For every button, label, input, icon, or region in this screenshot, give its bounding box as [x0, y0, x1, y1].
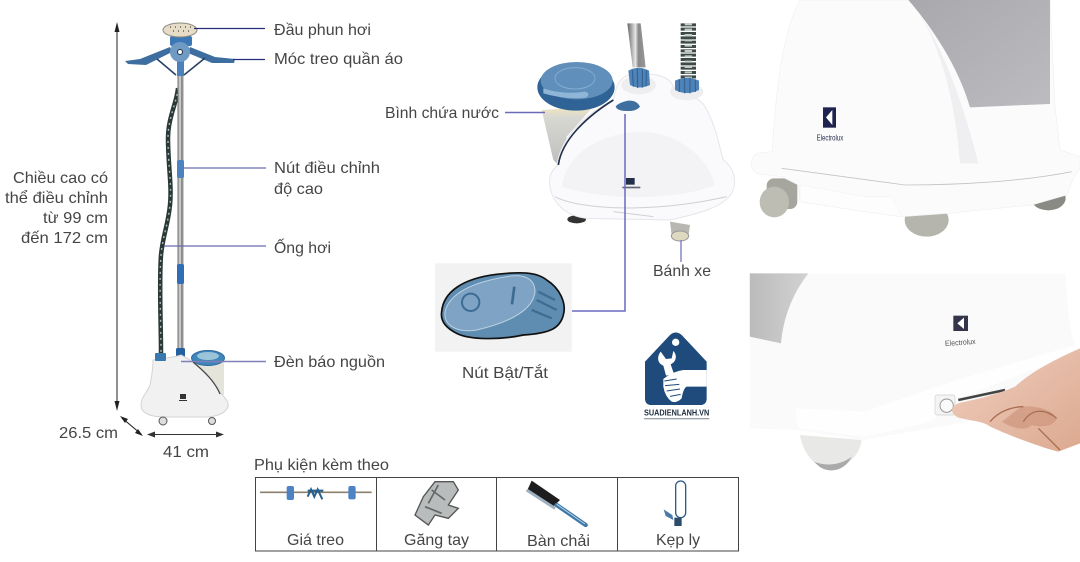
- icon: housing side shade: [918, 12, 978, 163]
- icon: Electrolux logo: Electrolux: [945, 337, 976, 348]
- icon: front caster: [904, 214, 949, 237]
- icon: housing dome shading: [562, 132, 715, 197]
- callout: water tank: Bình chứa nước: [385, 105, 499, 122]
- icon: base rim highlight: [750, 343, 1080, 437]
- panel: switch background: [435, 263, 572, 352]
- icon: base seam: [782, 168, 1072, 185]
- item: hanging bar: Giá treo: [287, 532, 344, 549]
- icon: wrench: [658, 351, 676, 376]
- panel: included accessories: [254, 457, 738, 551]
- item: glove: Găng tay: [404, 532, 469, 549]
- icon: gray tank panel: [750, 273, 808, 343]
- icon: left foot: [567, 215, 586, 223]
- icon: finger lines: [664, 379, 681, 396]
- icon: release button: [935, 395, 955, 415]
- icon: base rim: [555, 197, 727, 217]
- icon: telescopic pole: [176, 76, 185, 358]
- icon: base shade: [800, 185, 902, 217]
- text: depth label: 26.5 cm: [59, 425, 118, 442]
- text: height note: [5, 170, 108, 247]
- icon: right caster: [1034, 196, 1066, 210]
- icon: rocker face: [445, 276, 535, 331]
- icon: logo: [622, 178, 640, 188]
- icon: water tank body: [542, 107, 593, 167]
- item: hanging bar: [260, 486, 372, 549]
- item: cup clip: [656, 481, 700, 549]
- icon: housing: [751, 0, 1080, 217]
- text: brand tagline strip: [644, 418, 709, 419]
- icon: housing seam: [558, 100, 613, 165]
- icon: pole and collar: [621, 23, 656, 94]
- text: height note: thể điều chỉnh: [5, 189, 108, 207]
- callout: height adjustment button: Nút điều chỉnh: [274, 160, 380, 177]
- icon: gray water tank panel: [908, 0, 1050, 107]
- callout: wheel: [653, 240, 711, 280]
- icon: house tag: [645, 332, 707, 405]
- icon: left caster: [760, 178, 797, 217]
- item: brush: Bàn chải: [527, 533, 590, 550]
- item: cup clip: Kẹp ly: [656, 532, 700, 549]
- icon: steam hose: [160, 88, 178, 354]
- icon: switch rear ridges: [532, 292, 557, 318]
- icon: front wheel: [670, 222, 690, 241]
- callout: steam hose: Ống hơi: [274, 237, 331, 257]
- text: height note: từ 99 cm: [43, 210, 108, 227]
- text: switch label: Nút Bật/Tắt: [462, 363, 549, 382]
- icon: off symbol: [462, 294, 479, 311]
- text: height note: Chiều cao có: [13, 170, 108, 187]
- heading: accessories: Phụ kiện kèm theo: [254, 457, 389, 474]
- icon: switch body: [441, 273, 564, 339]
- panel: photo of steamer casters: [751, 0, 1080, 237]
- icon: hand: [952, 348, 1080, 452]
- image: base unit: [537, 23, 735, 241]
- item: brush: [527, 481, 590, 550]
- text: height note: đến 172 cm: [21, 230, 108, 247]
- panel: full steamer diagram: [5, 22, 403, 461]
- icon: caster: [800, 435, 862, 464]
- image: power switch close-up: [435, 263, 572, 352]
- callout: garment hanger: Móc treo quần áo: [274, 51, 403, 68]
- icon: power switch: [616, 101, 640, 111]
- icon: housing: [750, 273, 1080, 440]
- callout: power light: Đèn báo nguồn: [274, 354, 385, 371]
- icon: fist and arm: [663, 370, 707, 402]
- logo: SUADIENLANH.VN: [644, 332, 709, 419]
- panel: close-up of steamer base: [385, 23, 735, 382]
- text: brand name: SUADIENLANH.VN: [644, 407, 709, 417]
- callout: steam head: Đầu phun hơi: [274, 22, 371, 39]
- callout: height adjustment button: [183, 160, 380, 198]
- icon: Electrolux logo: Electrolux: [817, 133, 843, 142]
- text: width label: 41 cm: [163, 444, 209, 461]
- icon: Electrolux logo: [945, 316, 976, 348]
- callout: wheel: Bánh xe: [653, 263, 711, 280]
- panel: photo of hand using the lock: [750, 273, 1080, 470]
- icon: steamer base: [141, 350, 228, 425]
- icon: steam head: [163, 23, 197, 46]
- table: accessory grid: [256, 477, 738, 551]
- icon: garment hanger: [125, 42, 235, 76]
- icon: main housing: [550, 73, 735, 220]
- icon: depth dimension arrow: [120, 416, 143, 436]
- icon: caster tread: [814, 457, 852, 470]
- icon: Electrolux logo: [817, 107, 843, 142]
- icon: width dimension arrow: [147, 432, 224, 438]
- icon: water tank lid: [537, 62, 615, 111]
- item: glove: [404, 482, 469, 549]
- arrow: power switch connector: [572, 114, 625, 311]
- icon: height dimension arrow: [114, 22, 120, 411]
- icon: hose and collar: [670, 23, 703, 100]
- icon: on symbol: [512, 287, 514, 304]
- icon: tag hole: [672, 339, 679, 346]
- callout: height adjustment button: độ cao: [274, 181, 323, 198]
